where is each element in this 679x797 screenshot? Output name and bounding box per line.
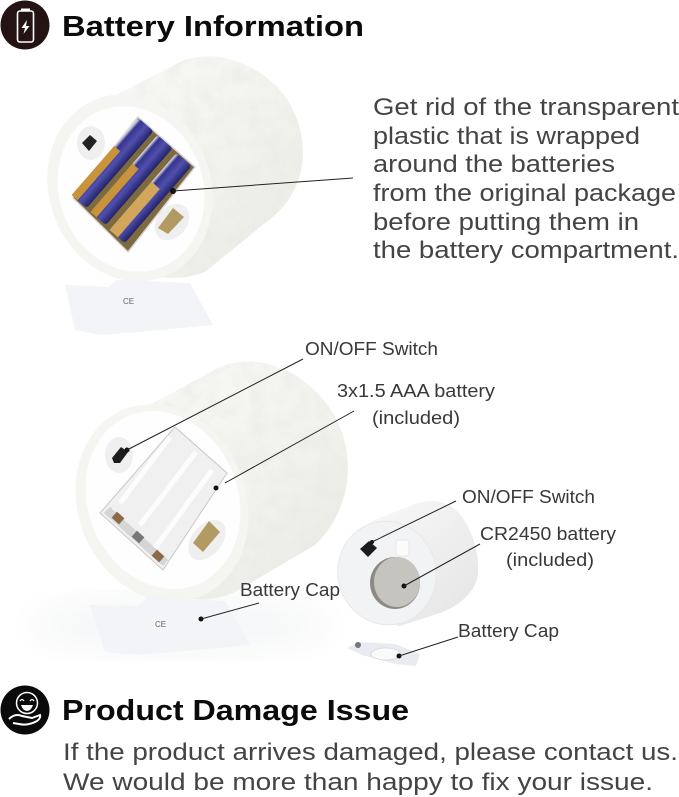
callout: CR2450 battery: CR2450 battery [480,524,616,544]
heading: Product Damage Issue: Product Damage Issue [62,695,409,727]
text block: damage message [63,739,678,796]
small candle face [326,510,448,636]
callout: Battery Cap (small) [396,621,559,658]
small battery cap [347,642,420,666]
candle body [118,56,303,278]
on/off switch [105,437,133,473]
callout: 3x1.5 AAA battery [214,381,495,490]
switch [360,541,377,557]
battery cap: CE [155,620,166,629]
battery 1 [72,118,154,208]
text block: battery instructions: before putting them in [373,209,639,236]
battery cap: CE [123,297,134,306]
callout: ON/OFF Switch (small) [370,487,595,544]
candle base face [21,71,239,305]
contact pad [181,513,233,567]
text block: battery instructions: plastic that is wrapped [373,123,640,150]
tab [396,540,409,556]
title: Battery Information: Battery Information [62,11,364,43]
product photo: candle with batteries [48,56,303,335]
callout: Battery Cap (large) [198,580,340,622]
coin battery [370,557,420,609]
battery 3 [110,153,192,243]
candle body [152,362,348,600]
callout: ON/OFF Switch (small): ON/OFF Switch [462,487,595,507]
text block: battery instructions: Get rid of the transparent [373,94,679,121]
product photo: small candle [326,501,478,636]
text block: battery instructions: around the batteries [373,151,615,178]
leader line: batteries [170,178,353,194]
small candle body [350,501,478,626]
callout: ON/OFF Switch (large) [124,339,438,452]
text block: damage message: If the product arrives damaged, please contact us. [63,739,678,766]
callout: CR2450 battery [402,524,616,588]
product photo: empty battery compartment [76,362,348,627]
text block: battery instructions: from the original package [373,180,676,207]
callout: 3x1.5 AAA battery: 3x1.5 AAA battery [337,381,495,401]
text block: battery instructions [373,94,679,264]
battery cap [65,280,213,335]
battery cap [90,597,250,655]
callout: Battery Cap (large): Battery Cap [240,580,340,600]
battery compartment with batteries [72,117,195,252]
icon: battery [0,0,50,50]
candle base face [46,378,278,628]
on/off switch [77,126,105,160]
battery 2 [91,135,173,225]
callout: Battery Cap (small): Battery Cap [458,621,559,641]
callout: CR2450 battery: (included) [506,550,594,570]
icon: smiling face over hand [0,686,50,734]
callout: 3x1.5 AAA battery: (included) [372,408,460,428]
soft floor shadow [30,595,330,655]
empty compartment [100,427,227,570]
contact pad [148,197,196,247]
text block: damage message: We would be more than happy to fix your issue. [63,769,653,796]
callout: ON/OFF Switch (large): ON/OFF Switch [305,339,438,359]
text block: battery instructions: the battery compartment. [373,237,679,264]
